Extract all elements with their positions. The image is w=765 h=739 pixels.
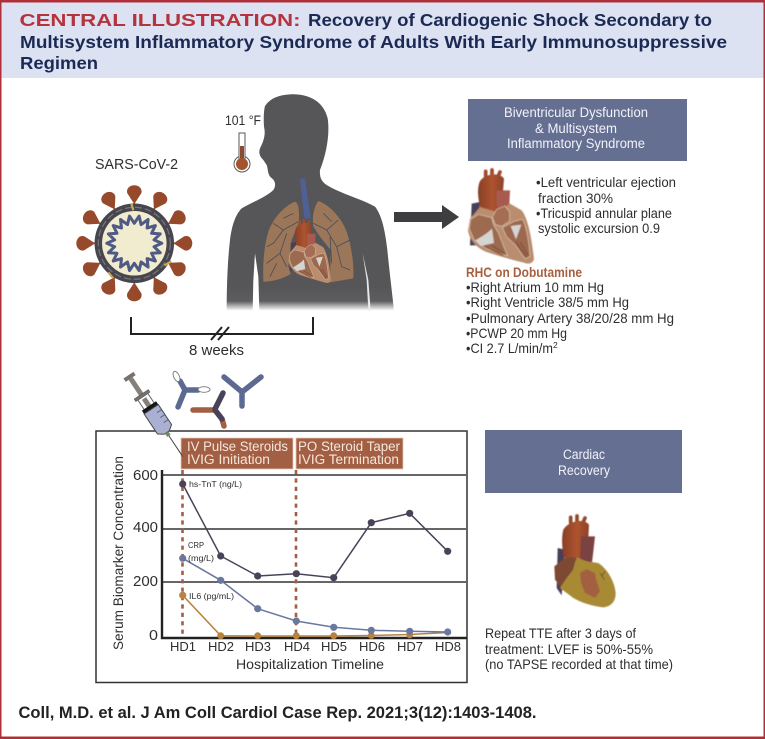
x-axis ticks: HD8 bbox=[435, 639, 461, 654]
title bbox=[20, 10, 727, 73]
x-axis ticks: HD1 bbox=[170, 639, 196, 654]
series: IL6 bbox=[179, 592, 448, 639]
text: echo findings: •Left ventricular ejection bbox=[536, 174, 676, 190]
panel: biventricular dysfunction: & Multisystem bbox=[535, 121, 617, 136]
text: RHC on dobutamine: •Pulmonary Artery 38/20/28 mm Hg bbox=[466, 310, 674, 326]
text: repeat TTE: (no TAPSE recorded at that time) bbox=[485, 656, 673, 672]
text: RHC on dobutamine: RHC on Dobutamine bbox=[466, 264, 582, 280]
x-axis ticks: HD6 bbox=[359, 639, 385, 654]
x-axis ticks: HD5 bbox=[321, 639, 347, 654]
label: 8 weeks: 8 weeks bbox=[189, 342, 244, 359]
callout: IV pulse steroids: IV Pulse Steroids bbox=[187, 439, 288, 454]
series labels bbox=[188, 479, 242, 601]
text: RHC on dobutamine: 2 bbox=[553, 340, 558, 350]
x-axis ticks: HD2 bbox=[208, 639, 234, 654]
timeline bracket bbox=[131, 317, 313, 340]
icon: antibody 1 bbox=[172, 370, 210, 407]
series labels: hs-TnT (ng/L) bbox=[189, 479, 242, 489]
y-axis ticks: 0 bbox=[149, 628, 158, 644]
trachea bbox=[300, 178, 311, 218]
citation: Coll, M.D. et al. J Am Coll Cardiol Case Rep. 2021;3(12):1403-1408. bbox=[18, 703, 536, 722]
callout: IV pulse steroids: IVIG Initiation bbox=[187, 452, 270, 467]
text: RHC on dobutamine: •Right Atrium 10 mm Hg bbox=[466, 279, 604, 295]
series: hs-TnT bbox=[179, 480, 451, 581]
series labels: IL6 (pg/mL) bbox=[189, 591, 234, 601]
text: RHC on dobutamine bbox=[466, 264, 674, 356]
figure: human silhouette with lungs and heart bbox=[227, 94, 394, 311]
y-axis ticks: 200 bbox=[133, 574, 158, 590]
title: Recovery of Cardiogenic Shock Secondary to bbox=[308, 10, 712, 30]
text: repeat TTE: treatment: LVEF is 50%-55% bbox=[485, 641, 653, 657]
series: CRP bbox=[179, 555, 451, 636]
text: RHC on dobutamine: •PCWP 20 mm Hg bbox=[466, 325, 567, 341]
y-axis ticks: 400 bbox=[133, 520, 158, 536]
lungs bbox=[263, 201, 353, 282]
x-axis ticks: HD3 bbox=[245, 639, 271, 654]
text: echo findings: fraction 30% bbox=[538, 190, 613, 206]
text: echo findings bbox=[536, 174, 676, 236]
text: RHC on dobutamine: •CI 2.7 L/min/m bbox=[466, 340, 553, 356]
series labels: (mg/L) bbox=[188, 553, 214, 563]
icon: recovered heart bbox=[554, 516, 616, 607]
axis title: x: Hospitalization Timeline bbox=[236, 656, 384, 672]
icon: antibody 2 bbox=[224, 377, 261, 406]
icon: thermometer bbox=[234, 133, 250, 172]
text: echo findings: systolic excursion 0.9 bbox=[538, 220, 660, 236]
callout: PO steroid taper: PO Steroid Taper bbox=[298, 439, 400, 454]
icon: virus bbox=[76, 185, 192, 301]
axis title: y: Serum Biomarker Concentration bbox=[110, 456, 126, 650]
label: SARS-CoV-2: SARS-CoV-2 bbox=[95, 156, 178, 173]
text: repeat TTE: Repeat TTE after 3 days of bbox=[485, 625, 636, 641]
icon: heart cross-section bbox=[468, 170, 534, 264]
text: repeat TTE bbox=[485, 625, 673, 672]
panel: cardiac recovery bbox=[485, 430, 682, 493]
icon: heart in chest bbox=[288, 220, 331, 283]
x-axis ticks: HD7 bbox=[397, 639, 423, 654]
text: echo findings: •Tricuspid annular plane bbox=[536, 205, 672, 221]
panel: cardiac recovery: Recovery bbox=[558, 463, 610, 478]
panel: biventricular dysfunction: Biventricular Dysfunction bbox=[504, 105, 648, 120]
label: temperature: 101 °F bbox=[225, 113, 261, 128]
panel: biventricular dysfunction bbox=[468, 99, 687, 161]
panel: biventricular dysfunction: Inflammatory Syndrome bbox=[507, 136, 645, 151]
series labels: CRP bbox=[188, 540, 204, 550]
y-axis ticks bbox=[133, 468, 158, 644]
arrow bbox=[394, 205, 459, 229]
title: Multisystem Inflammatory Syndrome of Adults With Early Immunosuppressive bbox=[20, 32, 727, 52]
y-axis ticks: 600 bbox=[133, 468, 158, 484]
callout: PO steroid taper bbox=[296, 438, 403, 469]
x-axis ticks: HD4 bbox=[284, 639, 310, 654]
callout: PO steroid taper: IVIG Termination bbox=[298, 452, 399, 467]
icon: antibody 3 bbox=[193, 393, 224, 426]
title: Regimen bbox=[20, 53, 98, 73]
text: RHC on dobutamine: •Right Ventricle 38/5 mm Hg bbox=[466, 294, 629, 310]
treatment markers bbox=[182, 470, 296, 637]
title: CENTRAL ILLUSTRATION: bbox=[20, 10, 300, 30]
chart: serum biomarkers bbox=[96, 431, 467, 682]
icon: syringe bbox=[121, 370, 190, 461]
callout: IV pulse steroids bbox=[181, 438, 293, 469]
header band bbox=[0, 0, 765, 78]
x-axis ticks bbox=[170, 639, 461, 654]
panel: cardiac recovery: Cardiac bbox=[563, 447, 605, 462]
